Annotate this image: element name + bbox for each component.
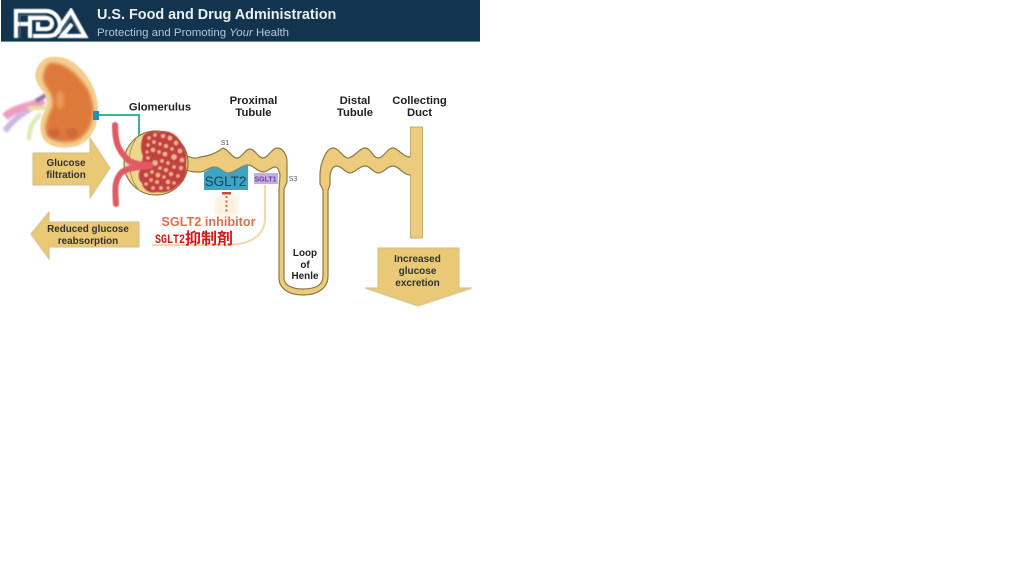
arrow: reduced glucose reabsorption (31, 212, 139, 259)
Bowman's capsule (124, 131, 188, 195)
arrow: increased glucose excretion: excretion (395, 278, 440, 289)
glomerulus (124, 131, 188, 195)
segment label: S3: S3 (289, 176, 297, 183)
heading: Collecting Duct (392, 95, 447, 119)
heading: Distal Tubule (337, 95, 373, 119)
arrow: reduced glucose reabsorption: Reduced glucose (47, 224, 129, 235)
heading: Loop of Henle: Loop (293, 248, 317, 259)
FDA logo (16, 11, 85, 38)
arrow: glucose filtration (33, 138, 110, 198)
label: SGLT2 inhibitor in Japanese: 抑制剤 (185, 230, 233, 248)
heading: Proximal Tubule: Proximal (230, 95, 277, 107)
heading: Loop of Henle (292, 248, 319, 282)
arrow: glucose filtration: filtration (46, 170, 86, 181)
capillary tuft (139, 131, 186, 193)
afferent and efferent arterioles (115, 125, 150, 204)
icon: renal vessels (5, 95, 47, 140)
banner title: U.S. Food and Drug Administration (97, 7, 336, 23)
arrow: increased glucose excretion (365, 248, 472, 306)
SGLT2 transporter: SGLT2 (205, 174, 246, 189)
heading: Loop of Henle: Henle (292, 271, 319, 282)
inhibition marker (215, 192, 238, 216)
FDA header banner (1, 0, 480, 42)
connector: kidney to glomerulus (93, 111, 139, 140)
heading: Collecting Duct: Collecting (392, 95, 447, 107)
arrow: increased glucose excretion: glucose (399, 266, 437, 277)
segment label: S1: S1 (221, 140, 229, 147)
heading: Distal Tubule: Distal (340, 95, 370, 107)
icon: kidney body (35, 57, 98, 148)
arrow: increased glucose excretion: Increased (394, 254, 441, 265)
SGLT1 transporter (254, 173, 278, 184)
proximal, loop and distal tubule (186, 148, 410, 295)
label: SGLT2 inhibitor in Japanese (155, 230, 233, 248)
label: SGLT2 inhibitor: SGLT2 inhibitor (161, 215, 256, 229)
SGLT1 transporter: SGLT1 (254, 176, 277, 184)
heading: Distal Tubule: Tubule (337, 107, 373, 119)
label: SGLT2 inhibitor in Japanese: SGLT2 (155, 232, 185, 247)
kidney illustration (5, 57, 98, 148)
arrow: reduced glucose reabsorption: reabsorption (58, 236, 118, 247)
arrow: glucose filtration: Glucose (47, 158, 86, 169)
heading: Collecting Duct: Duct (407, 107, 432, 119)
collecting duct (408, 127, 422, 238)
reabsorption path (152, 185, 265, 245)
heading: Proximal Tubule: Tubule (235, 107, 272, 119)
banner tagline: Protecting and Promoting Your Health (97, 27, 289, 39)
heading: Loop of Henle: of (300, 260, 310, 271)
SGLT2 transporter (204, 165, 248, 190)
heading: Proximal Tubule (230, 95, 277, 119)
heading: Glomerulus: Glomerulus (129, 102, 191, 114)
